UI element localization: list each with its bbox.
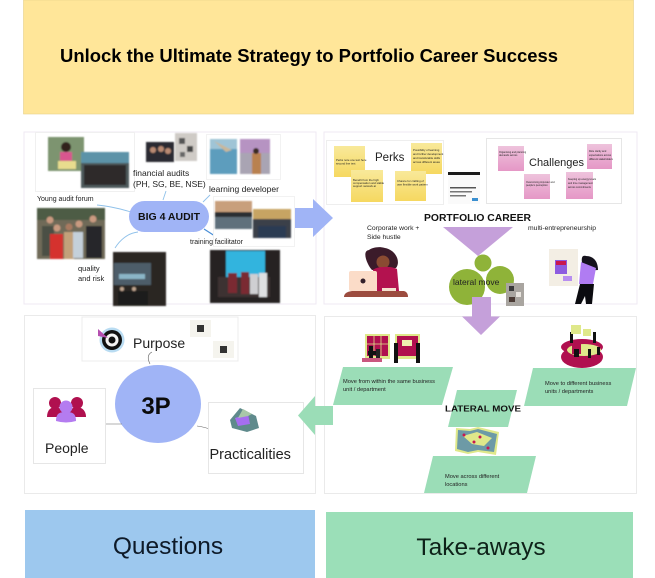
card: perks: second line text: [336, 162, 356, 166]
card: perks: Perks: [375, 152, 405, 164]
card: young audit forum photos: [36, 132, 134, 192]
card: perks: support network at: [353, 184, 376, 188]
shape: different locations: [424, 456, 536, 493]
card: purpose: Purpose: [133, 335, 185, 351]
icon: people group: [47, 397, 86, 422]
card: people: [34, 388, 106, 464]
card: challenges: [486, 138, 622, 204]
label: quality and risk: quality: [78, 264, 100, 273]
arrow: to 3P: [298, 396, 333, 435]
shape: different units: [524, 368, 636, 406]
card: challenges: Organising and planning: [499, 151, 527, 154]
card: perks: across different areas: [413, 160, 440, 164]
big 4 audit pill: [129, 201, 209, 232]
card: perks: [326, 140, 444, 204]
card: practicalities: [208, 402, 304, 474]
card: challenges: Overcoming imposter and: [526, 181, 555, 184]
photo: team group: [37, 208, 105, 259]
label: multi-entrepreneurship: multi-entrepreneurship: [528, 225, 596, 232]
heading: lateral move: LATERAL MOVE: [445, 404, 522, 414]
card: perks: own flexible work pattern: [397, 182, 428, 186]
icon: woman with laptop: [344, 247, 408, 297]
card: people: People: [45, 440, 89, 456]
box: take-aways: Take-aways: [416, 534, 546, 561]
icon: target: [98, 328, 124, 352]
box: take-aways: [326, 512, 633, 578]
label: quality and risk: [78, 264, 105, 283]
qr codes: [190, 320, 234, 358]
card: challenges: Keeping up energy levels: [568, 178, 597, 181]
card: training facilitator photos: [214, 196, 294, 246]
box: questions: [25, 510, 315, 578]
icon: money stacks: [230, 408, 259, 432]
label: corporate work + side hustle: Corporate work +: [367, 225, 419, 232]
card: perks: and transferable skills: [413, 156, 441, 160]
label: lateral move: lateral move: [453, 277, 500, 287]
photo: financial audits team: [146, 133, 197, 162]
label: training facilitator: training facilitator: [190, 239, 244, 246]
card: practicalities: Practicalities: [210, 447, 291, 463]
3P circle: [115, 365, 201, 443]
panel: 3P: [24, 316, 316, 494]
box: questions: Questions: [113, 533, 223, 560]
heading: portfolio career: PORTFOLIO CAREER: [424, 213, 532, 224]
qr code: [506, 283, 524, 306]
shape: different units: units / departments: [545, 389, 594, 395]
card: challenges: expectations across: [589, 154, 612, 157]
funnel triangle: [443, 227, 513, 256]
icon: lateral move leaves: [449, 254, 514, 305]
shape: within same unit: Move from within the same business: [343, 379, 435, 385]
label: corporate work + side hustle: Side hustle: [367, 234, 401, 241]
label: corporate work + side hustle: [367, 225, 419, 241]
header banner: [24, 0, 634, 114]
image: phone screenshot: [448, 172, 480, 204]
card: challenges: Role clarity and: [589, 150, 607, 153]
card: perks: and further development: [413, 152, 444, 156]
card: perks: Chance for crafting of: [397, 179, 424, 183]
card: learning developer photos: [206, 134, 280, 180]
arrow: to lateral move: [462, 297, 500, 335]
shape: within same unit: unit / department: [343, 387, 386, 393]
panel: portfolio career: [324, 132, 637, 306]
card: perks: Perks note one text here: [336, 158, 367, 162]
label: learning developer: learning developer: [209, 184, 279, 194]
panel: big 4 audit: [24, 132, 316, 306]
icon: round stage: [561, 325, 603, 368]
label: financial audits: [133, 168, 206, 189]
big 4 audit pill: BIG 4 AUDIT: [138, 211, 201, 223]
shape: different locations: Move across different: [445, 474, 500, 480]
icon: woman at planning board: [549, 249, 598, 304]
shape: different locations: locations: [445, 482, 468, 488]
connector arrows: [97, 191, 218, 248]
card: purpose: [82, 317, 238, 361]
connectors: [78, 352, 229, 440]
card: perks: Possibility of learning: [413, 148, 440, 152]
card: challenges: Challenges: [529, 157, 585, 169]
3P circle: 3P: [141, 393, 171, 420]
label: financial audits: financial audits: [133, 168, 189, 178]
card: perks: compensation and stable: [353, 181, 385, 185]
card: challenges: people's perception: [526, 184, 548, 187]
icon: office scene: [362, 334, 420, 363]
card: challenges: across commitments: [568, 186, 592, 189]
card: perks: Benefit from the high: [353, 178, 379, 182]
shape: center parallelogram: [448, 390, 517, 427]
arrow: to portfolio career: [295, 199, 333, 237]
card: challenges: demands across: [499, 154, 518, 157]
shape: within same unit: [333, 367, 453, 405]
panel: lateral move: [324, 316, 636, 494]
label: financial audits: (PH, SG, BE, NSE): [133, 179, 206, 189]
card: challenges: different stakeholders: [589, 158, 614, 161]
photo: group before blue screen: [210, 250, 280, 303]
label: quality and risk: and risk: [78, 274, 105, 283]
photo: conference screen: [113, 252, 166, 306]
card: challenges: and time management: [568, 182, 593, 185]
icon: world map: [455, 427, 499, 455]
title: Unlock the Ultimate Strategy to Portfolio Career Success: [60, 46, 558, 66]
label: young audit forum: Young audit forum: [37, 196, 94, 203]
shape: different units: Move to different business: [545, 381, 611, 387]
